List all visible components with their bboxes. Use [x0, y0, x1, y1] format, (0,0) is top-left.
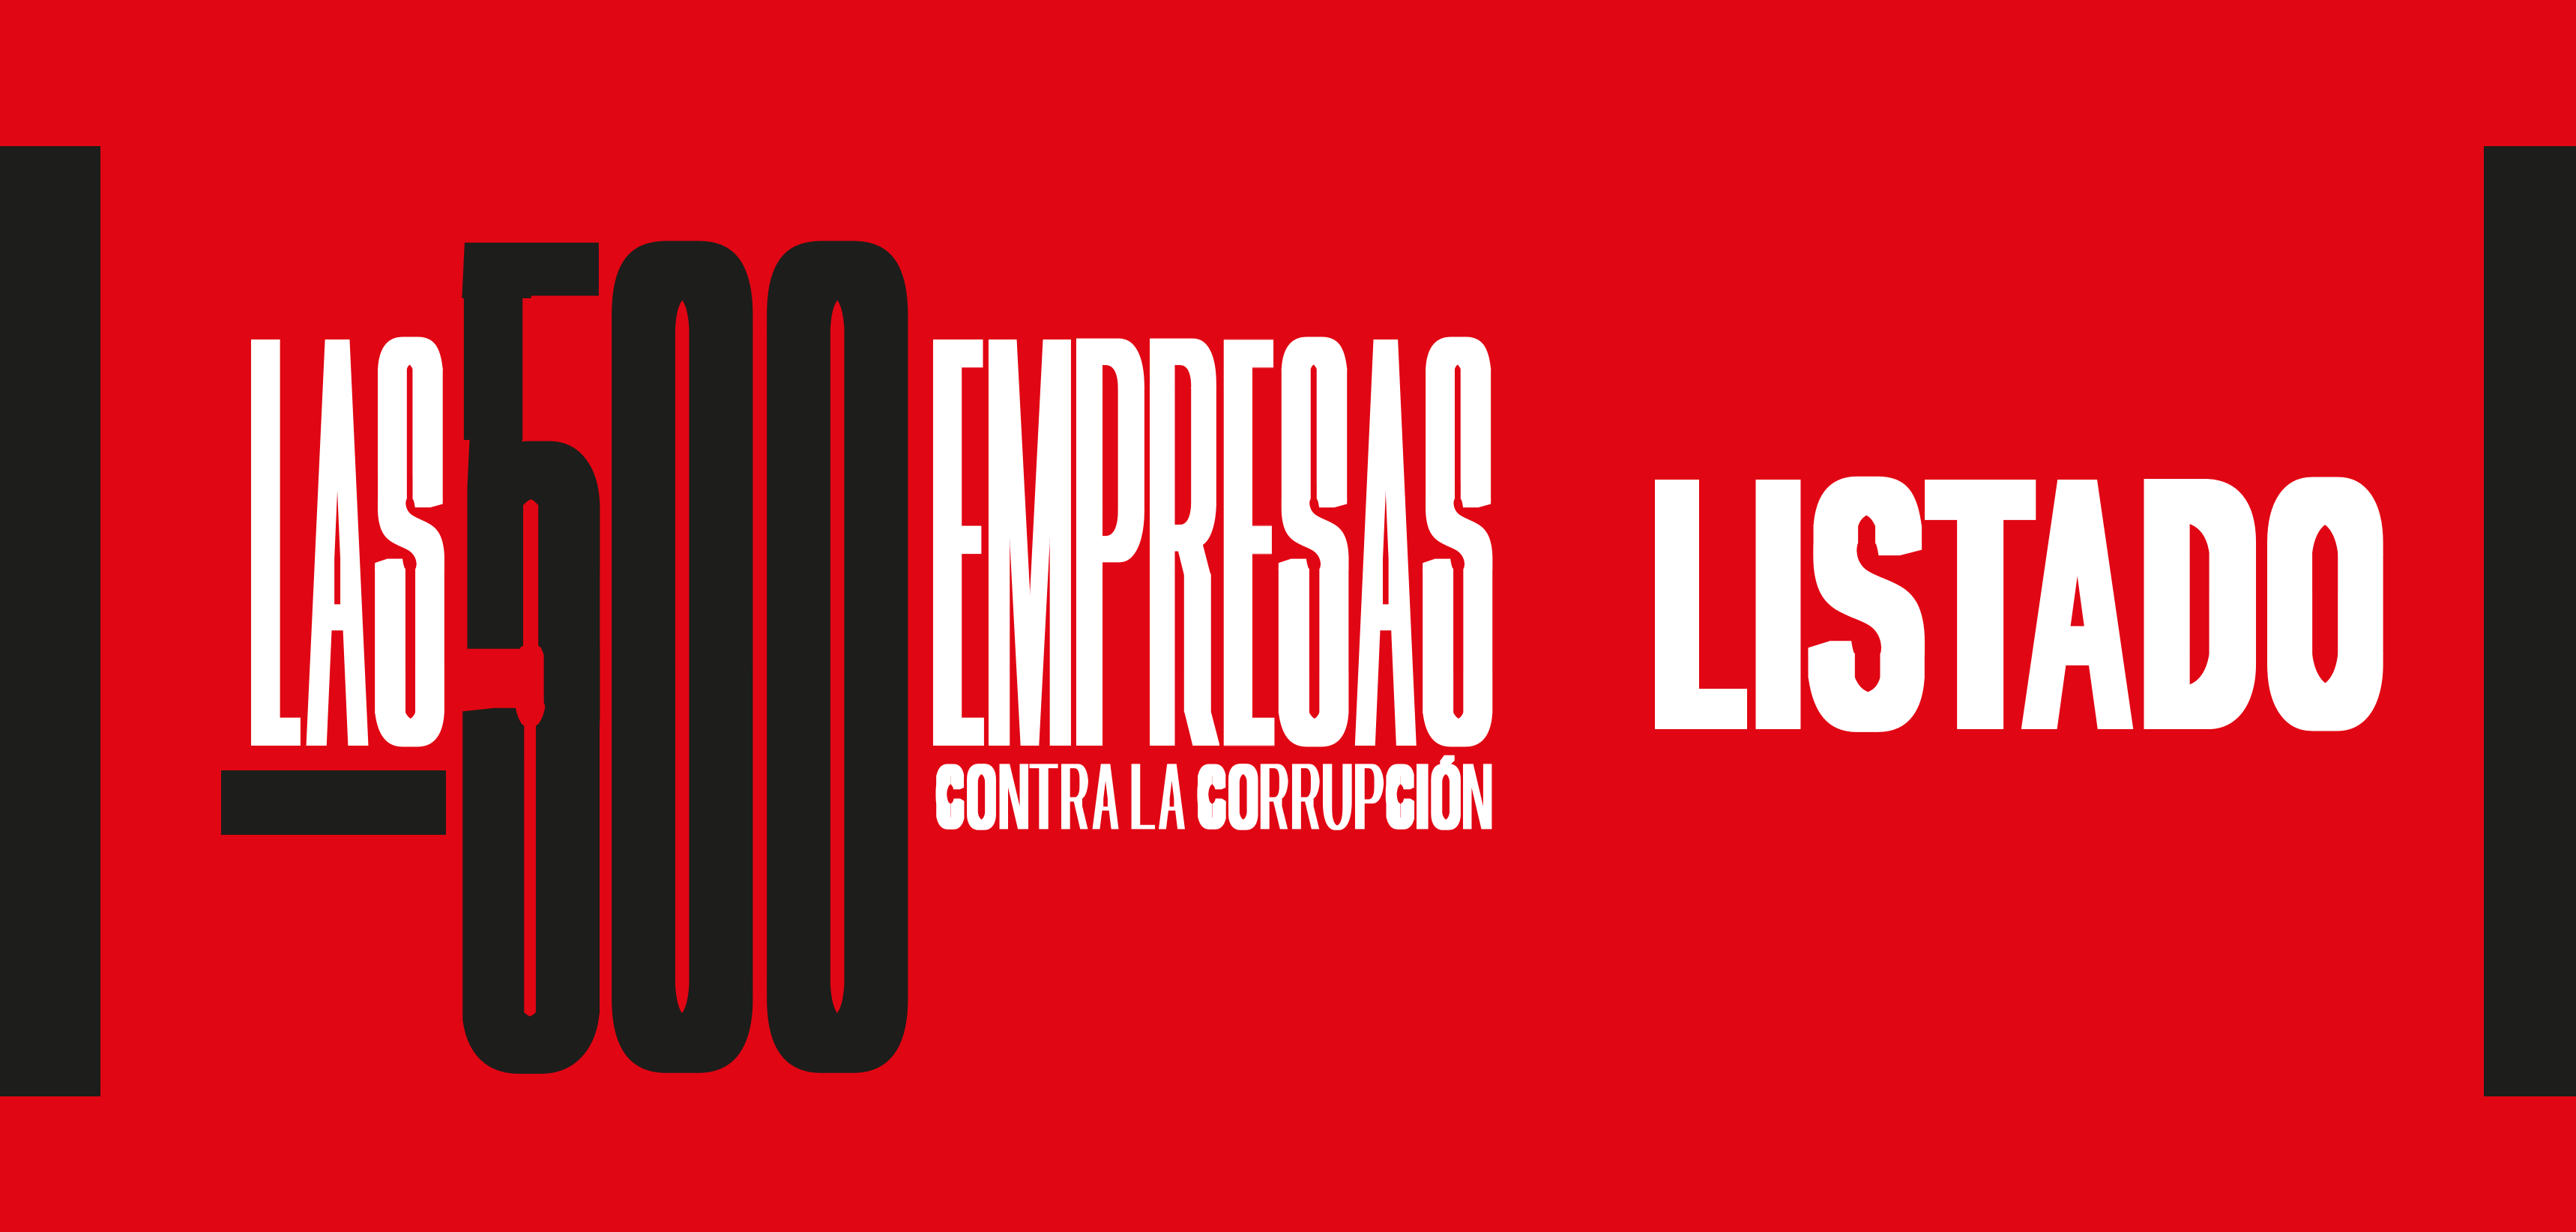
word EMPRESAS: S [1428, 505, 1488, 714]
heading LISTADO: D [2147, 499, 2249, 708]
tagline CONTRA LA CORRUPCIÓN: I [1414, 737, 1431, 855]
tagline CONTRA LA CORRUPCIÓN: O [1230, 772, 1256, 822]
number 500: 0 [773, 540, 902, 773]
heading LISTADO: S [1814, 403, 1920, 738]
word EMPRESAS: M [985, 175, 1075, 907]
tagline CONTRA LA CORRUPCIÓN: T [1031, 737, 1057, 855]
word LAS: L [258, 175, 292, 907]
word EMPRESAS: P [1076, 471, 1141, 722]
tagline CONTRA LA CORRUPCIÓN: N [1462, 737, 1493, 855]
tagline CONTRA LA CORRUPCIÓN: A [1158, 737, 1186, 855]
tagline CONTRA LA CORRUPCIÓN: C [1199, 758, 1224, 821]
tagline CONTRA LA CORRUPCIÓN: R [1291, 737, 1321, 855]
tagline CONTRA LA CORRUPCIÓN [938, 737, 1493, 855]
heading LISTADO: O [2275, 499, 2376, 708]
word EMPRESAS: R [1150, 471, 1215, 722]
tagline CONTRA LA CORRUPCIÓN: Ó [1433, 772, 1459, 822]
word EMPRESAS: E [1231, 175, 1266, 907]
tagline CONTRA LA CORRUPCIÓN: N [998, 737, 1030, 855]
word LAS: A [307, 175, 367, 907]
word EMPRESAS: E [940, 175, 976, 907]
word EMPRESAS: S [1283, 505, 1345, 714]
heading LISTADO: L [1659, 401, 1738, 806]
right black band [2484, 146, 2576, 1096]
tagline CONTRA LA CORRUPCIÓN: U [1322, 737, 1353, 855]
word LAS [258, 175, 441, 907]
tagline CONTRA LA CORRUPCIÓN: P [1354, 737, 1384, 855]
number 500 [466, 489, 902, 824]
word EMPRESAS: A [1356, 175, 1415, 907]
tagline CONTRA LA CORRUPCIÓN: L [1130, 737, 1155, 855]
heading LISTADO [1659, 401, 2376, 806]
tagline CONTRA LA CORRUPCIÓN: O [968, 772, 995, 822]
number 500: 5 [466, 489, 596, 824]
logo: las 500 empresas contra la corrupción [221, 175, 1493, 907]
tagline CONTRA LA CORRUPCIÓN: C [1387, 758, 1413, 821]
tagline CONTRA LA CORRUPCIÓN: C [938, 758, 962, 821]
tagline CONTRA LA CORRUPCIÓN: R [1060, 737, 1089, 855]
left black band [0, 146, 100, 1096]
underline bar below LAS [221, 770, 446, 835]
tagline CONTRA LA CORRUPCIÓN: R [1259, 737, 1289, 855]
heading LISTADO: A [2025, 401, 2129, 806]
tagline CONTRA LA CORRUPCIÓN: A [1092, 737, 1119, 855]
word LAS: S [380, 505, 441, 714]
heading LISTADO: T [1936, 401, 2024, 806]
heading LISTADO: I [1760, 401, 1797, 806]
number 500: 0 [618, 540, 746, 773]
word EMPRESAS [940, 175, 1488, 907]
